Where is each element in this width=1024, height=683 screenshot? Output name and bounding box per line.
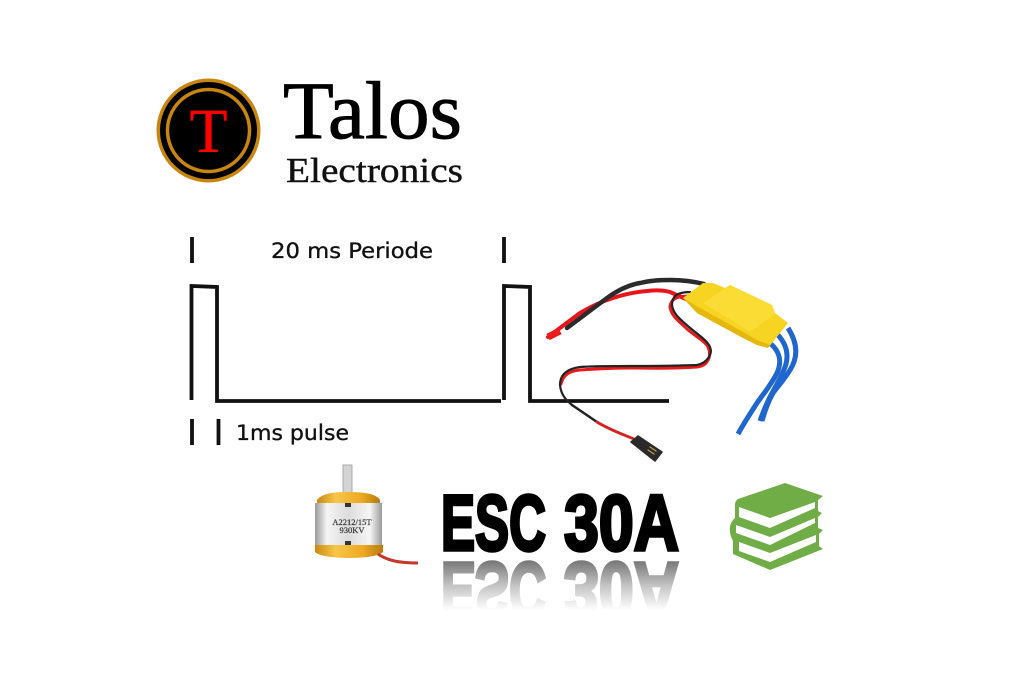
- ESC module photo illustration: [548, 280, 796, 461]
- ESC 30A reflection: ESC: [441, 546, 546, 635]
- silver body: [315, 503, 382, 545]
- motor photo illustration: 930KV: [339, 525, 365, 535]
- period label: 20 ms Periode: [271, 239, 433, 263]
- ESC 30A reflection: 30A: [564, 546, 679, 635]
- top bell: [317, 492, 380, 503]
- servo connector: [631, 436, 662, 461]
- ESC 30A headline: ESC: [441, 478, 546, 567]
- shaft: [343, 465, 352, 494]
- logo emblem: T: [190, 98, 227, 166]
- battery leads: [548, 280, 704, 337]
- motor photo illustration: [315, 465, 418, 563]
- brand subtitle: Electronics: [286, 151, 463, 190]
- ESC 30A reflection: [441, 546, 679, 635]
- brand name: Talos: [283, 65, 462, 156]
- gold base: [315, 545, 383, 558]
- icon: stack of books: [730, 483, 823, 570]
- motor label: A2212/15T: [332, 517, 372, 527]
- signal cable: [560, 292, 711, 439]
- ESC 30A headline: 30A: [564, 478, 679, 567]
- ESC 30A headline: [441, 478, 679, 567]
- motor wires: [738, 328, 796, 434]
- motor cable: [378, 554, 418, 563]
- yellow housing: [683, 283, 788, 348]
- pulse waveform diagram: [192, 237, 669, 445]
- logo emblem: [156, 78, 260, 182]
- pulse label: 1ms pulse: [236, 421, 349, 445]
